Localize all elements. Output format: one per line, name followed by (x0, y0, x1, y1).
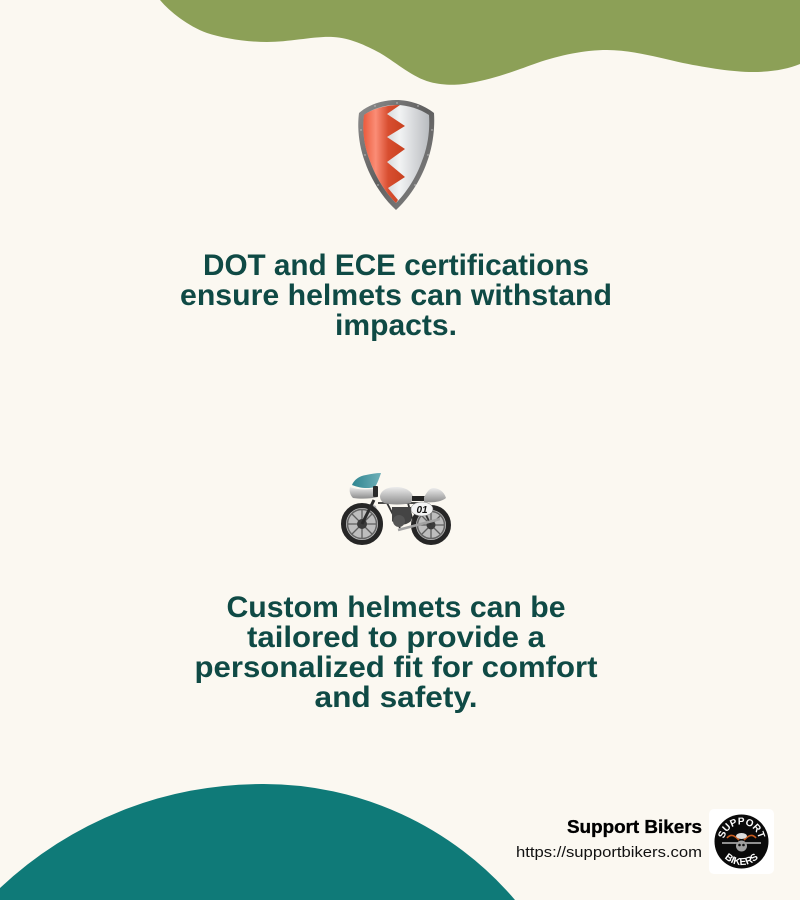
logo: Support Bikers badge (709, 809, 774, 874)
bottom teal arc (0, 784, 515, 900)
text block: custom helmets: and safety. (314, 681, 478, 714)
text block: custom helmets: Custom helmets can be (226, 591, 566, 624)
text block: certifications: impacts. (335, 309, 457, 342)
logo: Support Bikers badge: SUPPORT (718, 818, 766, 838)
top green wave (160, 0, 800, 85)
number plate: 01 (416, 505, 428, 516)
text block: certifications: DOT and ECE certifications (203, 249, 589, 282)
text block: custom helmets: tailored to provide a (247, 621, 545, 654)
rear wheel (414, 508, 448, 542)
icon: shield (358, 100, 434, 210)
footer brand name: Support Bikers (567, 817, 702, 837)
footer url: https://supportbikers.com (516, 844, 702, 861)
front wheel (344, 506, 380, 542)
text block: certifications: ensure helmets can withstand (180, 279, 612, 312)
text block: certifications (180, 249, 612, 342)
text block: custom helmets: personalized fit for comfort (194, 651, 598, 684)
icon: motorcycle (344, 473, 448, 542)
logo: Support Bikers badge: BIKERS (724, 853, 758, 866)
text block: custom helmets (194, 591, 598, 714)
